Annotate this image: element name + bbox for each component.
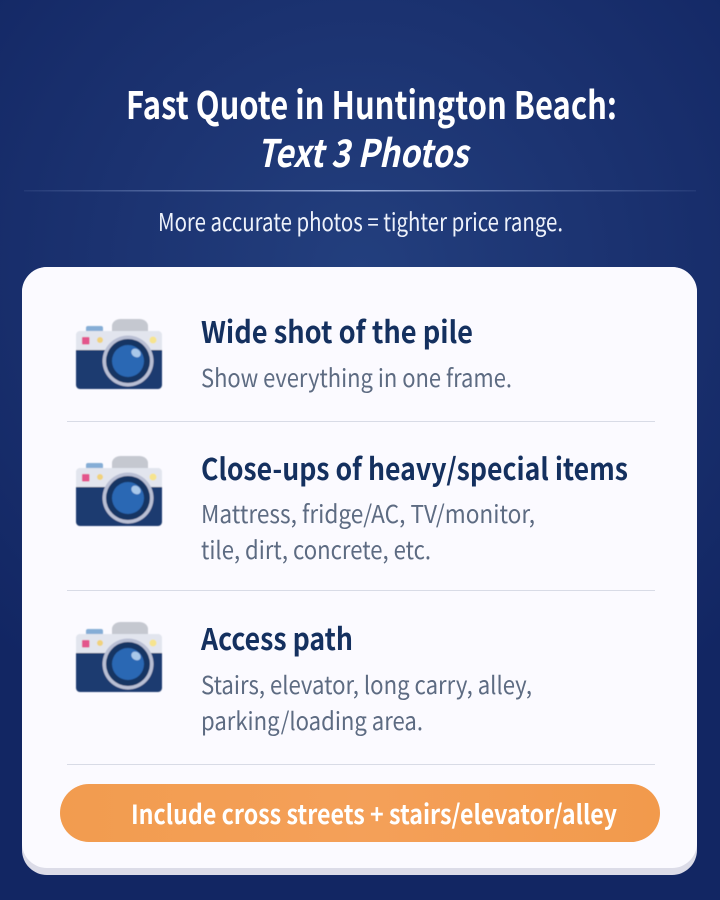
panel: checklist card [22,267,697,875]
subtitle: More accurate photos = tighter price range. [158,204,563,239]
icon: camera 2 [76,456,162,526]
icon: camera 3 [76,622,162,692]
title [126,75,617,178]
callout: include cross streets [60,784,660,842]
heading 2: Close-ups of heavy/special items [201,445,628,489]
heading 3: Access path [200,615,353,659]
body 3: parking/loading area. [201,703,423,738]
title divider [24,190,696,192]
body 3 [201,667,532,738]
body 2 [201,496,535,567]
body 2: tile, dirt, concrete, etc. [201,532,431,567]
icon: camera 1 [76,319,162,389]
item 3: access path [76,615,532,738]
body 1: Show everything in one frame. [201,360,512,395]
title: Fast Quote in Huntington Beach: [126,75,617,130]
title: Text 3 Photos [257,123,472,178]
heading 1: Wide shot of the pile [201,308,473,352]
body 2: Mattress, fridge/AC, TV/monitor, [201,496,535,531]
item 2: close-ups [76,445,628,567]
body 3: Stairs, elevator, long carry, alley, [201,667,532,702]
item 1: wide shot [76,308,512,395]
callout: include cross streets: Include cross streets + stairs/elevator/alley [131,793,617,832]
